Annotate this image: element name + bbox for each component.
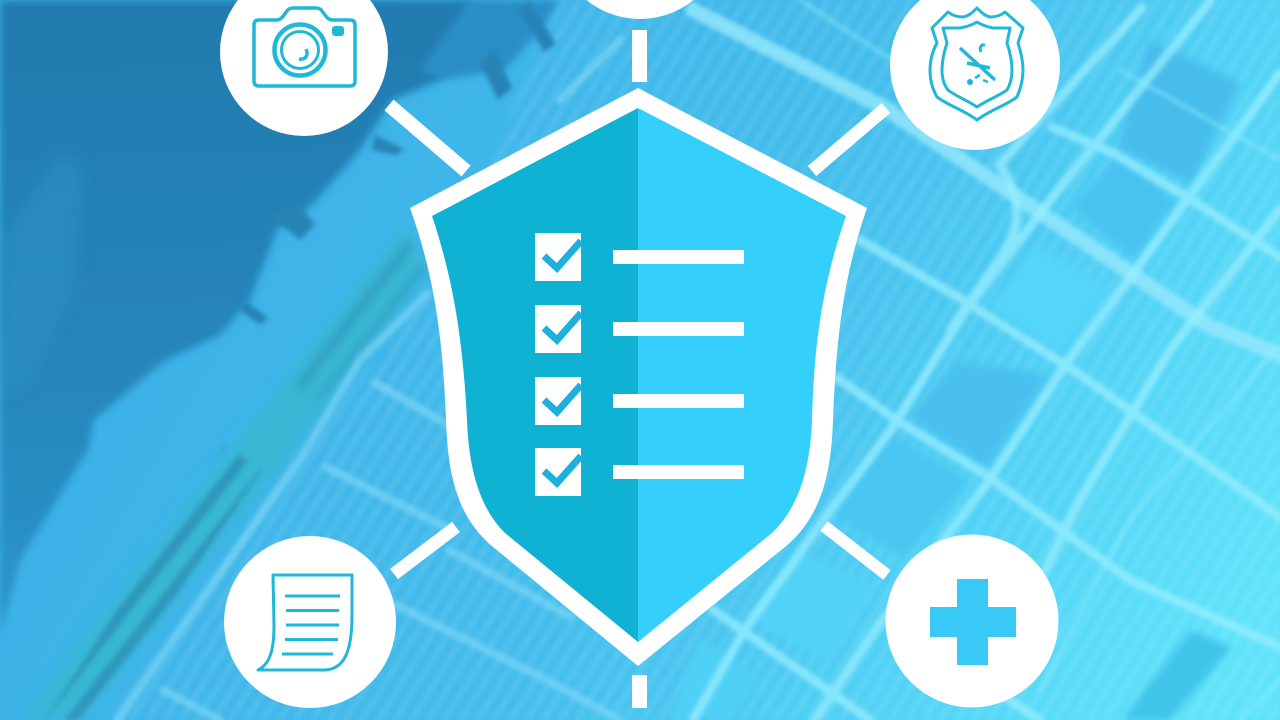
checklist line 2 xyxy=(613,322,744,336)
pier shadows xyxy=(240,2,556,325)
checklist line 4 xyxy=(613,465,744,479)
circle: top center xyxy=(555,0,725,19)
waterfront land strip xyxy=(20,225,430,720)
map blocks xyxy=(670,40,1240,720)
connector: bottom xyxy=(632,675,647,708)
connector: bottom right xyxy=(824,526,887,575)
left road xyxy=(118,40,620,720)
checklist xyxy=(535,233,744,496)
connector: top xyxy=(632,30,647,82)
connector: top left xyxy=(389,105,466,171)
icon: camera xyxy=(220,0,388,136)
shield left half xyxy=(432,108,638,642)
main cross road xyxy=(693,10,1280,355)
icon: medical cross xyxy=(886,534,1058,708)
checklist line 3 xyxy=(613,394,744,408)
water area xyxy=(0,0,475,637)
checkbox 3 xyxy=(535,377,581,425)
dark pier basin xyxy=(420,0,560,80)
checklist line 1 xyxy=(613,250,744,264)
connector: top right xyxy=(812,108,886,171)
checkbox 4 xyxy=(535,448,581,496)
connector: bottom left xyxy=(394,527,456,574)
lighter inlet xyxy=(0,150,85,400)
shield right half xyxy=(638,108,846,642)
icon: document xyxy=(224,536,396,708)
icon: police badge xyxy=(890,0,1060,150)
shield xyxy=(410,88,867,666)
checkbox 2 xyxy=(535,305,581,353)
checkbox 1 xyxy=(535,233,581,281)
